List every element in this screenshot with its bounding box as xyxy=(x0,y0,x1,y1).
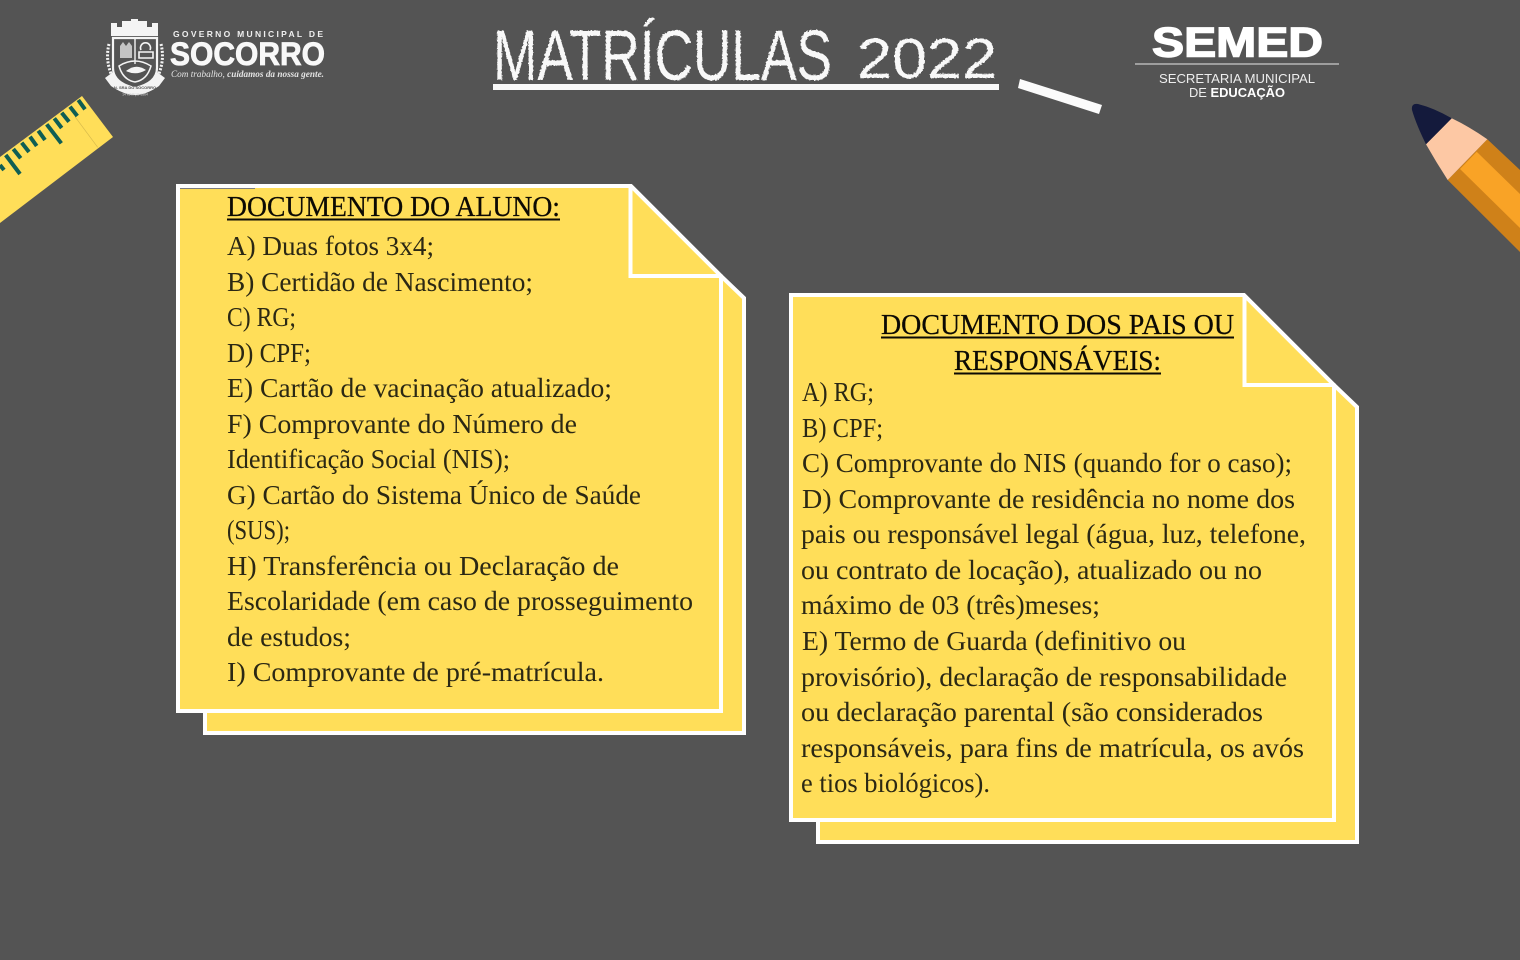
document list: pais ou responsável legal (água, luz, telefone, xyxy=(801,518,1306,549)
document list: H) Transferência ou Declaração de xyxy=(227,550,619,581)
crest: N. SRA DO SOCORRO xyxy=(114,85,156,90)
logo: Governo Municipal de Socorro: Com trabalho, cuidamos da nossa gente. xyxy=(171,70,324,80)
heading xyxy=(881,310,1234,377)
logo: SEMED: DE EDUCAÇÃO xyxy=(1189,85,1285,100)
front sheet xyxy=(178,186,721,711)
heading: DOCUMENTO DOS PAIS OU xyxy=(881,310,1234,341)
title: MATRÍCULAS xyxy=(493,17,832,96)
document list: I) Comprovante de pré-matrícula. xyxy=(227,656,604,687)
document list: B) CPF; xyxy=(802,412,883,443)
title: 2022 xyxy=(857,27,997,91)
document list: de estudos; xyxy=(227,621,351,652)
document list: máximo de 03 (três)meses; xyxy=(801,589,1100,620)
document list xyxy=(801,376,1306,798)
document list xyxy=(227,230,693,687)
icon: pencil xyxy=(1412,104,1520,252)
back sheet xyxy=(818,385,1357,842)
document list: responsáveis, para fins de matrícula, os avós xyxy=(801,732,1304,763)
panel: documento do aluno xyxy=(178,186,744,733)
logo: SEMED: SECRETARIA MUNICIPAL xyxy=(1159,71,1315,86)
document list: Escolaridade (em caso de prosseguimento xyxy=(227,585,693,616)
ruler icon xyxy=(0,96,113,223)
panel: documento dos pais ou responsaveis xyxy=(791,295,1357,842)
logo: Governo Municipal de Socorro xyxy=(105,19,325,96)
document list: ou declaração parental (são considerados xyxy=(801,696,1263,727)
back sheet xyxy=(205,276,744,733)
document list: A) Duas fotos 3x4; xyxy=(227,230,434,261)
crest xyxy=(105,19,165,96)
document list: E) Cartão de vacinação atualizado; xyxy=(227,372,612,403)
crest: 14 MARÇO 1864 xyxy=(122,92,148,96)
logo: SEMED xyxy=(1135,18,1339,100)
document list: e tios biológicos). xyxy=(801,767,990,798)
document list: G) Cartão do Sistema Único de Saúde xyxy=(227,479,641,510)
document list: B) Certidão de Nascimento; xyxy=(227,266,533,297)
logo: SEMED: SEMED xyxy=(1152,18,1323,66)
document list: D) CPF; xyxy=(227,337,311,368)
document list: D) Comprovante de residência no nome dos xyxy=(802,483,1295,514)
document list: E) Termo de Guarda (definitivo ou xyxy=(802,625,1186,656)
front sheet xyxy=(791,295,1334,820)
document list: C) Comprovante do NIS (quando for o caso); xyxy=(802,447,1292,478)
document list: C) RG; xyxy=(227,301,296,332)
document list: provisório), declaração de responsabilidade xyxy=(801,661,1287,692)
logo: Governo Municipal de Socorro: GOVERNO MUNICIPAL DE xyxy=(173,29,323,39)
heading: RESPONSÁVEIS: xyxy=(954,346,1161,377)
document list: A) RG; xyxy=(802,376,874,407)
document list: (SUS); xyxy=(227,514,290,545)
document list: Identificação Social (NIS); xyxy=(227,443,510,474)
document list: F) Comprovante do Número de xyxy=(227,408,577,439)
logo: Governo Municipal de Socorro: SOCORRO xyxy=(170,36,325,72)
document list: ou contrato de locação), atualizado ou no xyxy=(801,554,1262,585)
chalk stick xyxy=(1018,79,1102,114)
title underline xyxy=(493,84,999,90)
heading: DOCUMENTO DO ALUNO: xyxy=(227,192,560,223)
